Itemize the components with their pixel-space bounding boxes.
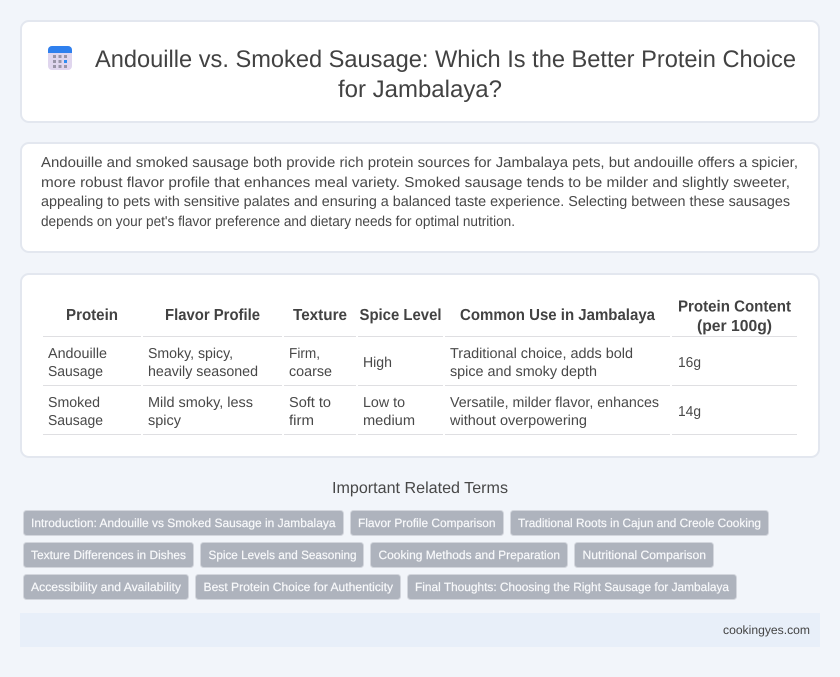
table header row: Protein	[66, 307, 118, 324]
text block: introduction: more robust flavor profile that enhances meal variety. Smoked sausage tends to be milder and slightly sweeter,	[41, 175, 790, 191]
table row: andouille sausage: Smoky, spicy,	[148, 346, 233, 362]
footer: cookingyes.com	[723, 623, 810, 637]
footer	[20, 613, 820, 647]
table header row: Protein Content	[678, 298, 792, 316]
table row: smoked sausage: Versatile, milder flavor, enhances	[450, 395, 659, 411]
tag list: related terms: Introduction: Andouille vs Smoked Sausage in Jambalaya	[31, 516, 336, 530]
table row: andouille sausage: heavily seasoned	[148, 364, 258, 380]
table row: smoked sausage: 14g	[678, 404, 701, 420]
tag list: related terms: Flavor Profile Comparison	[358, 516, 496, 530]
table row: andouille sausage: Traditional choice, adds bold	[450, 346, 633, 362]
panel: title card	[21, 21, 819, 122]
title: Andouille vs. Smoked Sausage: Which Is the Better Protein Choice	[95, 46, 796, 73]
table row: smoked sausage: Sausage	[48, 413, 103, 429]
title	[95, 46, 796, 103]
table row: smoked sausage: firm	[289, 413, 314, 429]
table row: andouille sausage: spice and smoky depth	[450, 364, 597, 380]
table row: smoked sausage: Smoked	[48, 395, 100, 411]
table row: andouille sausage: Andouille	[48, 346, 107, 362]
table row: andouille sausage: High	[363, 355, 392, 371]
tag list: related terms: Best Protein Choice for Authenticity	[204, 580, 393, 594]
table row: smoked sausage: Low to	[363, 395, 405, 411]
table header row: Spice Level	[360, 307, 442, 324]
table row: andouille sausage: coarse	[289, 364, 332, 380]
text block: introduction: depends on your pet's flavor preference and dietary needs for optimal nutrition.	[41, 214, 515, 230]
table header row: Texture	[293, 307, 347, 324]
text block: introduction: Andouille and smoked sausage both provide rich protein sources for Jambalaya pets, but andouille offers a spicier,	[41, 155, 798, 171]
table header row: Flavor Profile	[165, 307, 260, 324]
tag list: related terms: Texture Differences in Dishes	[31, 548, 186, 562]
table row: andouille sausage: 16g	[678, 355, 701, 371]
table header row: (per 100g)	[697, 318, 772, 335]
tag list: related terms: Spice Levels and Seasoning	[208, 548, 356, 562]
tag list: related terms	[24, 510, 768, 600]
table row: smoked sausage	[48, 395, 701, 429]
panel: intro text	[21, 143, 819, 252]
icon: calendar	[48, 46, 72, 70]
table row: smoked sausage: Soft to	[289, 395, 331, 411]
title: for Jambalaya?	[338, 76, 502, 103]
panel: comparison table	[21, 274, 819, 457]
tag list: related terms: Final Thoughts: Choosing the Right Sausage for Jambalaya	[415, 580, 729, 594]
table row: smoked sausage: medium	[363, 413, 415, 429]
table header row	[66, 298, 792, 335]
table row: andouille sausage: Firm,	[289, 346, 320, 362]
heading: important related terms: Important Related Terms	[332, 480, 508, 497]
tag list: related terms: Accessibility and Availability	[31, 580, 181, 594]
table row: andouille sausage	[48, 346, 701, 380]
tag list: related terms: Traditional Roots in Cajun and Creole Cooking	[518, 516, 761, 530]
text block: introduction	[41, 155, 798, 230]
tag list: related terms: Nutritional Comparison	[582, 548, 706, 562]
table row: smoked sausage: Mild smoky, less	[148, 395, 253, 411]
table row: smoked sausage: spicy	[148, 413, 182, 429]
table header row: Common Use in Jambalaya	[460, 307, 655, 324]
table row: andouille sausage: Sausage	[48, 364, 103, 380]
table row: smoked sausage: without overpowering	[449, 413, 587, 429]
text block: introduction: appealing to pets with sensitive palates and ensuring a balanced taste experience. Selecting between these sausages	[41, 194, 790, 210]
tag list: related terms: Cooking Methods and Preparation	[378, 548, 560, 562]
